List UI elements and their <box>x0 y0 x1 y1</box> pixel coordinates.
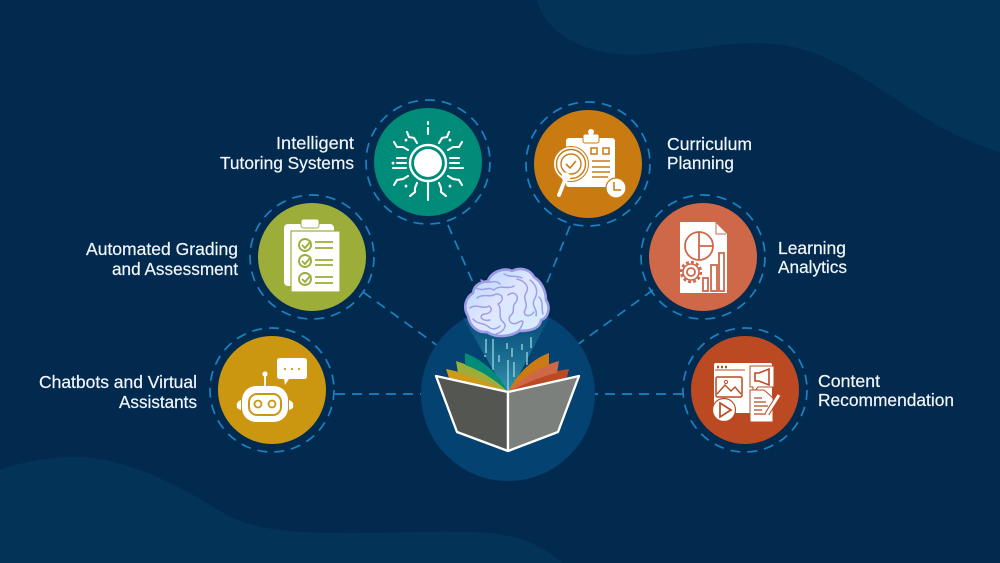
item: Curriculum Planning <box>526 102 650 226</box>
dashed ring <box>250 195 374 319</box>
rust disc <box>691 336 799 444</box>
label: Curriculum Planning <box>667 134 752 173</box>
dashed ring <box>210 328 334 452</box>
label: Intelligent Tutoring Systems: Intelligent <box>276 133 354 153</box>
light beam <box>463 318 549 392</box>
coral disc <box>649 203 757 311</box>
icon: media content collage <box>712 363 779 422</box>
item: Automated Grading and Assessment <box>250 195 374 319</box>
dashed ring <box>526 102 650 226</box>
connector: analytics to centre <box>577 290 653 345</box>
item: Intelligent Tutoring Systems <box>366 100 490 224</box>
teal disc <box>374 108 482 216</box>
connector: curriculum to centre <box>544 226 570 290</box>
book pages: left fan <box>446 353 508 392</box>
label: Intelligent Tutoring Systems <box>220 133 354 173</box>
icon: robot with speech bubble <box>237 358 307 422</box>
connector: chatbots to centre <box>335 393 424 395</box>
connector: tutoring to centre <box>448 225 474 285</box>
icon: checklist clipboard <box>284 219 340 292</box>
label: Chatbots and Virtual Assistants: Assistants <box>119 392 197 412</box>
label: Curriculum Planning: Planning <box>667 153 734 173</box>
label: Content Recommendation: Content <box>818 371 880 391</box>
icon: report with pie chart and gear <box>680 222 727 293</box>
label: Content Recommendation: Recommendation <box>818 390 954 410</box>
central hub circle <box>421 307 595 481</box>
orange disc <box>534 110 642 218</box>
dashed ring <box>366 100 490 224</box>
olive disc <box>258 203 366 311</box>
data streams <box>485 337 531 392</box>
label: Learning Analytics <box>778 238 847 277</box>
brain <box>465 269 548 336</box>
label: Intelligent Tutoring Systems: Tutoring Systems <box>220 153 354 173</box>
open book <box>436 376 579 451</box>
item: Learning Analytics <box>641 195 765 319</box>
label: Automated Grading and Assessment: and Assessment <box>112 259 238 279</box>
background wave: bottom left <box>0 457 562 563</box>
connector: content recommendation to centre <box>592 393 683 395</box>
label: Chatbots and Virtual Assistants: Chatbots and Virtual <box>39 372 197 392</box>
book pages: right fan <box>508 353 569 392</box>
dashed ring <box>683 328 807 452</box>
label: Automated Grading and Assessment <box>86 239 238 279</box>
central illustration: book and brain <box>436 269 579 451</box>
icon: AI chip sun <box>393 122 463 200</box>
label: Learning Analytics: Analytics <box>778 257 847 277</box>
item: Content Recommendation <box>683 328 807 452</box>
background wave: top right <box>537 0 1000 152</box>
label: Automated Grading and Assessment: Automated Grading <box>86 239 238 259</box>
icon: clipboard with magnifier and clock <box>554 129 626 198</box>
label: Content Recommendation <box>818 371 954 410</box>
label: Learning Analytics: Learning <box>778 238 846 258</box>
label: Chatbots and Virtual Assistants <box>39 372 197 412</box>
label: Curriculum Planning: Curriculum <box>667 134 752 154</box>
gold disc <box>218 336 326 444</box>
item: Chatbots and Virtual Assistants <box>210 328 334 452</box>
dashed ring <box>641 195 765 319</box>
connector: grading to centre <box>363 292 438 346</box>
